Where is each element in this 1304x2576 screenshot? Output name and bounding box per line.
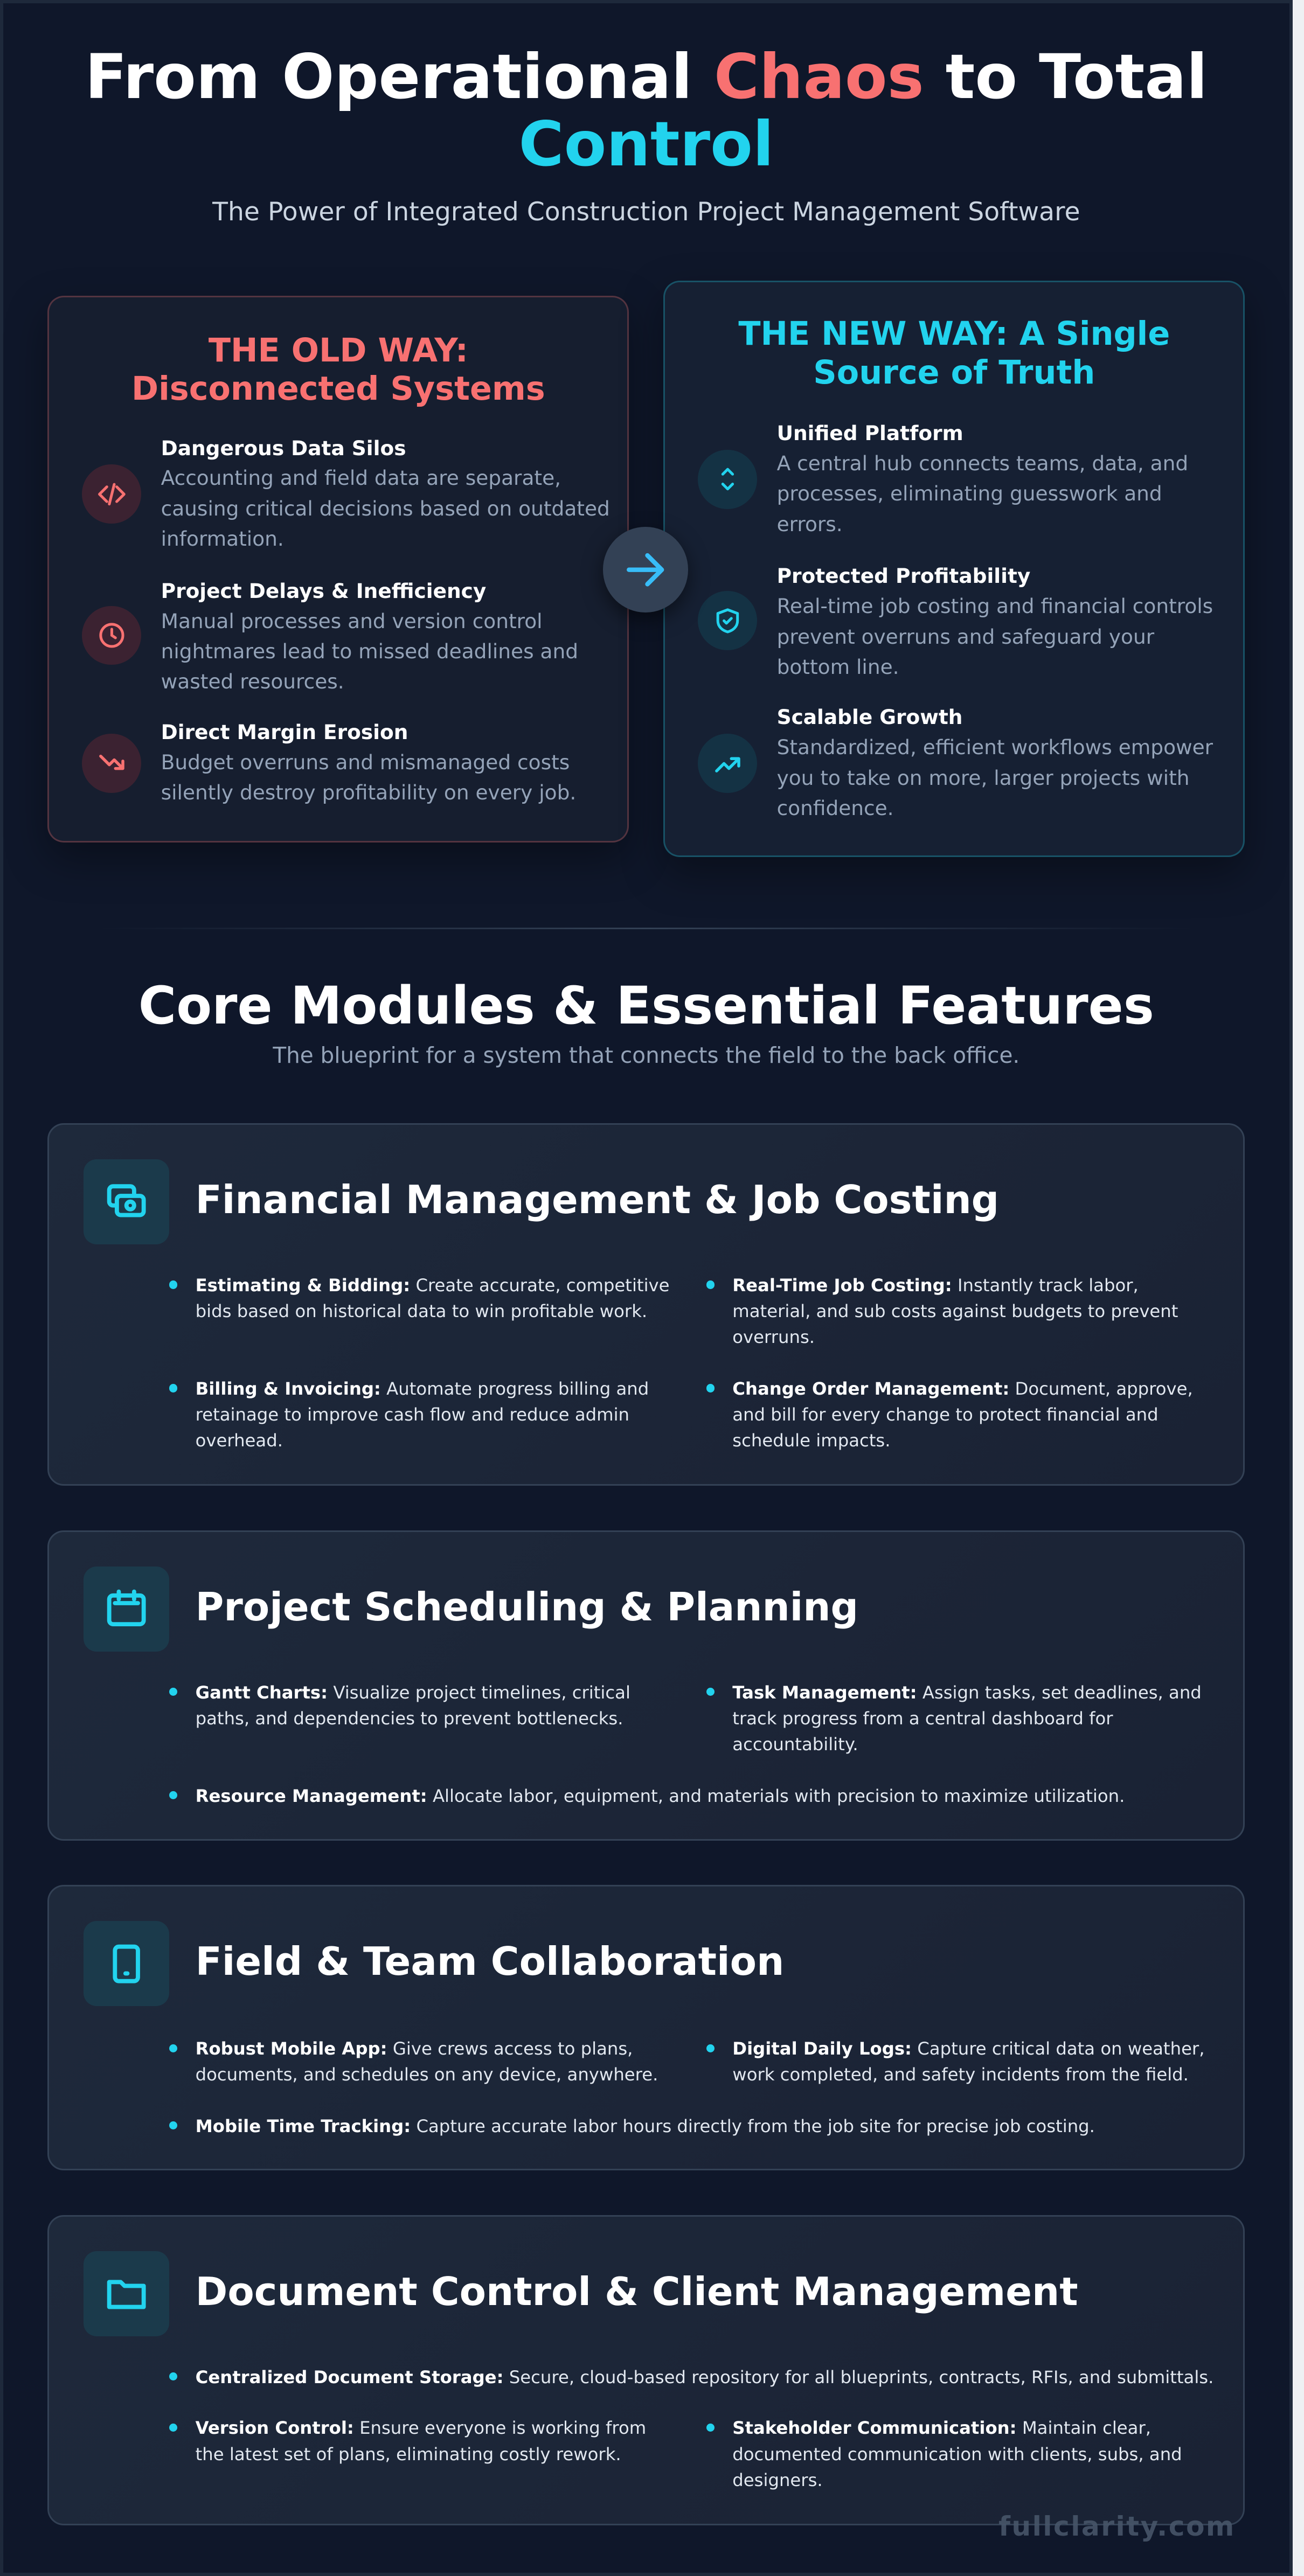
bullet: Estimating & Bidding: Create accurate, competitive bids based on historical data to win profitable work. [196, 1275, 670, 1321]
new way heading [738, 315, 1170, 392]
bullet: Resource Management: Allocate labor, equipment, and materials with precision to maximize utilization. [196, 1786, 1125, 1806]
icon: trend down [82, 734, 141, 793]
icon: clock [82, 606, 141, 665]
bullet: Billing & Invoicing: Automate progress billing and retainage to improve cash flow and reduce admin overhead. [196, 1378, 649, 1451]
icon: folder [84, 2251, 169, 2336]
icon: trend up [698, 734, 757, 793]
icon: tablet [84, 1921, 169, 2006]
bullet: Stakeholder Communication: Maintain clear, documented communication with clients, subs, and designers. [732, 2418, 1182, 2490]
panel: new way [663, 281, 1245, 857]
watermark: fullclarity.com [998, 2510, 1236, 2542]
bullet: Centralized Document Storage: Secure, cloud-based repository for all blueprints, contracts, RFIs, and submittals. [196, 2367, 1213, 2387]
bullet: Real-Time Job Costing: Instantly track labor, material, and sub costs against budgets to prevent overruns. [732, 1275, 1178, 1347]
icon: code [82, 464, 141, 524]
panel: scheduling [47, 1530, 1245, 1841]
bullet: Version Control: Ensure everyone is working from the latest set of plans, eliminating costly rework. [196, 2418, 646, 2464]
icon: calendar [84, 1567, 169, 1652]
old way heading [131, 332, 545, 408]
item: scalable growth: Scalable Growth [777, 705, 962, 729]
item: protected profitability: Real-time job costing and financial controls prevent overruns and safeguard your bottom line. [777, 594, 1213, 679]
arrow [603, 527, 688, 612]
icon: chevrons [698, 450, 757, 509]
title [85, 41, 1208, 180]
subtitle: The Power of Integrated Construction Project Management Software [212, 197, 1080, 227]
title: Control [518, 109, 774, 180]
module title: Financial Management & Job Costing [196, 1177, 999, 1222]
panel: old way [47, 296, 629, 843]
icon: money [84, 1159, 169, 1244]
bullet: Gantt Charts: Visualize project timelines, critical paths, and dependencies to prevent bottlenecks. [196, 1682, 630, 1729]
old way heading: THE OLD WAY: [209, 332, 468, 370]
new way heading: Source of Truth [813, 354, 1095, 392]
bullet: Task Management: Assign tasks, set deadlines, and track progress from a central dashboard for accountability. [732, 1682, 1202, 1755]
section subtitle: The blueprint for a system that connects the field to the back office. [273, 1042, 1019, 1068]
item: data silos: Accounting and field data are separate, causing critical decisions based on outdated information. [161, 466, 610, 551]
item: margin erosion: Direct Margin Erosion [161, 720, 408, 744]
item: margin erosion [161, 720, 576, 804]
item: delays: Project Delays & Inefficiency [161, 579, 486, 603]
item: margin erosion: Budget overruns and mismanaged costs silently destroy profitability on every job. [161, 750, 576, 804]
section heading: Core Modules & Essential Features [138, 976, 1154, 1036]
bullet: Mobile Time Tracking: Capture accurate labor hours directly from the job site for precise job costing. [196, 2116, 1095, 2136]
panel: financial management [47, 1123, 1245, 1486]
title: From Operational Chaos to Total [85, 41, 1208, 113]
icon: shield [698, 591, 757, 650]
item: unified platform: Unified Platform [777, 421, 963, 445]
bullet: Robust Mobile App: Give crews access to plans, documents, and schedules on any device, anywhere. [196, 2038, 658, 2085]
panel: field collaboration [47, 1885, 1245, 2170]
new way heading: THE NEW WAY: A Single [738, 315, 1170, 353]
bullet: Digital Daily Logs: Capture critical data on weather, work completed, and safety incidents from the field. [732, 2038, 1204, 2085]
item: delays: Manual processes and version control nightmares lead to missed deadlines and wasted resources. [161, 609, 578, 693]
module title: Document Control & Client Management [196, 2269, 1078, 2314]
old way heading: Disconnected Systems [131, 370, 545, 408]
bullet: Change Order Management: Document, approve, and bill for every change to protect financial and schedule impacts. [732, 1378, 1193, 1451]
module title: Project Scheduling & Planning [196, 1584, 858, 1630]
item: protected profitability: Protected Profitability [777, 564, 1030, 588]
panel: document control [47, 2215, 1245, 2525]
item: data silos: Dangerous Data Silos [161, 436, 406, 460]
item: unified platform: A central hub connects teams, data, and processes, eliminating guesswork and errors. [777, 451, 1188, 536]
module title: Field & Team Collaboration [196, 1939, 784, 1984]
item: scalable growth: Standardized, efficient workflows empower you to take on more, larger projects with confidence. [777, 735, 1213, 820]
